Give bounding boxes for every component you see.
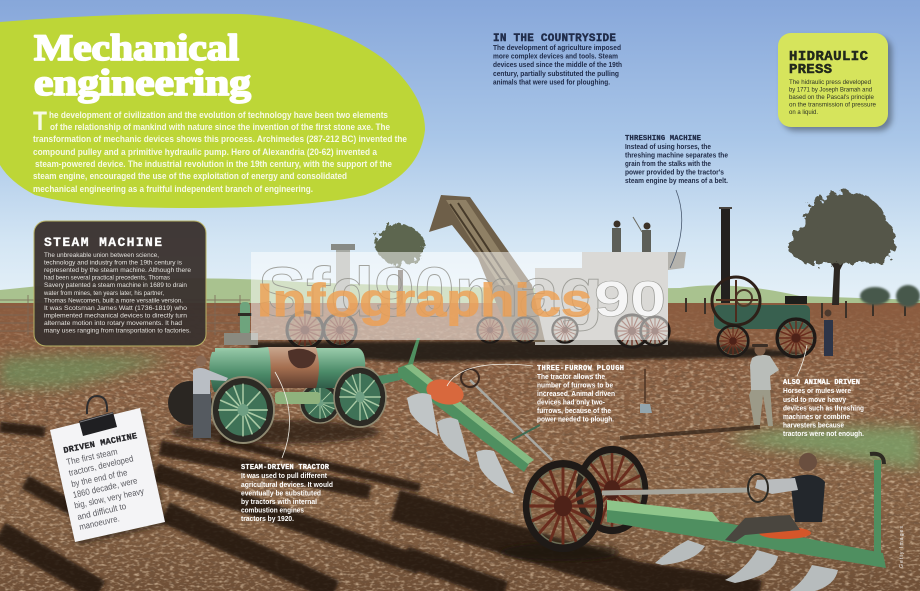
icon: binder clip (79, 396, 117, 436)
threshing machine (250, 195, 800, 362)
text block: threshing machine: power provided by the tractor's (625, 168, 724, 176)
text block: three-furrow plough: number of furrows to be (537, 380, 613, 390)
intro paragraph: of the relationship of mankind with nature since the invention of the first stone axe. The (50, 122, 390, 132)
text block: steam-driven tractor: tractors by 1920. (241, 514, 294, 523)
watermark band (251, 252, 668, 340)
intro paragraph: he development of civilization and the evolution of technology have been two elements (49, 110, 388, 120)
distant green hills (0, 278, 920, 312)
panel: hidraulic press (778, 33, 892, 131)
steam machine text: alternate motion into rotary movements. It had (44, 320, 182, 327)
watermark outline text: Sfd90mag (258, 253, 603, 331)
background steam engine (712, 207, 833, 357)
text block: also animal driven: ALSO ANIMAL DRIVEN (783, 379, 860, 387)
title (34, 28, 252, 104)
workers on thresher (612, 217, 651, 252)
steam machine heading: STEAM MACHINE (44, 235, 162, 250)
hidraulic press text: by 1771 by Joseph Bramah and (789, 86, 872, 94)
text block: threshing machine: grain from the stalks with the (625, 159, 711, 168)
steam machine text (43, 252, 191, 334)
plough driver (725, 453, 825, 542)
text block: also animal driven: harvesters because (783, 420, 844, 430)
text block: threshing machine: Instead of using horses, the (625, 142, 711, 151)
intro paragraph: T (33, 106, 47, 136)
hidraulic press text (789, 79, 876, 116)
hidraulic press heading (789, 49, 869, 78)
watermark number: 90 (594, 271, 666, 327)
text block: also animal driven: tractors were not enough. (783, 429, 864, 438)
steam driven tractor (168, 302, 404, 444)
intro paragraph (33, 106, 407, 194)
intro paragraph: steam engine, encouraged the use of the exploitation of energy and consolidated (33, 171, 347, 181)
driven machine text: 1860 decade, were (72, 475, 138, 500)
text block: three-furrow plough (537, 365, 624, 424)
shovel (640, 369, 652, 413)
text block: in the countryside: The development of agriculture imposed (493, 43, 621, 52)
driven machine text: and difficult to (76, 501, 127, 522)
sky background (0, 0, 920, 305)
intro paragraph: mechanical engineering as a fruitful independent branch of engineering. (33, 184, 313, 194)
fence right (686, 298, 905, 318)
text block: steam-driven tractor: It was used to pull different (241, 471, 327, 480)
driven machine heading: DRIVEN MACHINE (63, 431, 138, 456)
hidraulic press heading: HIDRAULIC (789, 49, 869, 65)
steam machine text: water from mines, ten years later, his partner, (43, 290, 164, 297)
text block: three-furrow plough: increased. Animal driven (537, 389, 615, 398)
distant tree left (376, 225, 424, 305)
steam machine text: had been several practical precedents, Thomas (44, 274, 171, 282)
ploughed soil (0, 303, 920, 591)
steam machine text: The unbreakable union between science, (44, 252, 159, 259)
hidraulic press text: on a liquid. (789, 109, 818, 116)
driven machine text (65, 446, 145, 532)
steam machine text: represented by the steam machine. Although there (44, 267, 191, 274)
text block: in the countryside: animals that were used for ploughing. (493, 78, 610, 86)
text block: three-furrow plough: devices had only two- (537, 398, 605, 406)
text block: three-furrow plough: The tractor allows the (537, 372, 605, 381)
wooden fence left (0, 295, 250, 335)
text block: three-furrow plough: furrows, because of the (537, 406, 611, 415)
steam machine text: Savery patented a steam machine in 1689 to drain (44, 282, 187, 289)
hidraulic press text: on the transmission of pressure (789, 102, 876, 108)
driven machine text: manoeuvre. (78, 513, 120, 532)
text block: also animal driven: machines or combine (783, 412, 850, 421)
panel: intro green blob (0, 14, 425, 208)
text block: also animal driven: devices such as threshing (783, 404, 864, 412)
furrow shadows (0, 427, 760, 591)
text block: three-furrow plough: THREE-FURROW PLOUGH (537, 365, 624, 373)
text block: steam-driven tractor: eventually be substituted (241, 488, 321, 498)
text block: three-furrow plough: power needed to plough. (537, 414, 614, 424)
arrow: plough leader line (447, 364, 533, 386)
text block: threshing machine: steam engine by means of a belt. (625, 176, 728, 185)
text block: in the countryside: more complex devices and tools. Steam (493, 52, 618, 60)
watermark orange wordmark: Infographics (257, 274, 592, 326)
tractor driver (193, 356, 228, 438)
text block: steam-driven tractor (241, 464, 333, 523)
hidraulic press text: based on the Pascal's principle (789, 94, 874, 101)
text block: steam-driven tractor: combustion engines (241, 506, 304, 514)
text block: also animal driven (783, 379, 864, 438)
driven machine text: big, slow, very heavy (73, 486, 145, 510)
hidraulic press heading: PRESS (789, 62, 832, 78)
steam machine text: Thomas Newcomen, built a more versatile version. (44, 298, 183, 304)
grass patch right (725, 427, 920, 470)
text block: threshing machine: THRESHING MACHINE (625, 135, 702, 143)
large tree right (789, 192, 896, 305)
text block: in the countryside: IN THE COUNTRYSIDE (493, 33, 616, 45)
text block: steam-driven tractor: agricultural devices. It would (241, 480, 333, 489)
standing man (749, 344, 779, 426)
text block: also animal driven: Horses or mules were (783, 386, 851, 395)
text block: threshing machine (625, 135, 728, 185)
text block: also animal driven: used to move heavy (783, 395, 847, 404)
title: engineering (34, 63, 252, 104)
arrow: animal driven leader line (797, 345, 807, 376)
text block: steam-driven tractor: STEAM-DRIVEN TRACTOR (241, 464, 330, 472)
steam machine text: technology and industry from the 19th century is (44, 260, 183, 266)
panel: steam machine (34, 221, 206, 346)
small trees right (860, 285, 920, 307)
grain feeder chimney (331, 244, 355, 308)
text block: in the countryside: century, partially substituted the pulling (493, 69, 619, 78)
driven machine text: tractors, developed (68, 453, 134, 478)
driven machine text: by the end of the (70, 467, 128, 489)
image credit: Getty Images (899, 526, 905, 568)
title: Mechanical (34, 28, 239, 69)
grass patch left (0, 355, 172, 388)
standing man shadow (620, 427, 760, 438)
hidraulic press text: The hidraulic press developed (789, 79, 871, 86)
text block: threshing machine: threshing machine separates the (625, 150, 728, 160)
panel: driven machine note (50, 396, 167, 545)
intro paragraph: compound pulley and a primitive hydraulic pump. Hero of Alexandria (20-62) invented a (33, 147, 378, 157)
three furrow plough (398, 338, 886, 591)
arrow: threshing leader line (670, 190, 682, 268)
text block: in the countryside (493, 33, 622, 86)
text block: steam-driven tractor: by tractors with internal (241, 497, 317, 506)
text block: in the countryside: devices used since the middle of the 19th (493, 60, 622, 69)
steam machine text: implemented mechanical devices to directly turn (44, 312, 187, 320)
intro paragraph: transformation of mechanic devices shows this process. Archimedes (287-212 BC) invented the (33, 134, 407, 144)
intro paragraph: steam-powered device. The industrial revolution in the 19th century, with the support of the (35, 159, 392, 169)
arrow: tractor leader line (275, 372, 290, 458)
steam machine text: It was Scotsman James Watt (1736-1819) who (44, 305, 187, 312)
driven machine text: The first steam (65, 446, 118, 467)
steam machine text: many uses ranging from transportation to factories. (44, 328, 191, 334)
